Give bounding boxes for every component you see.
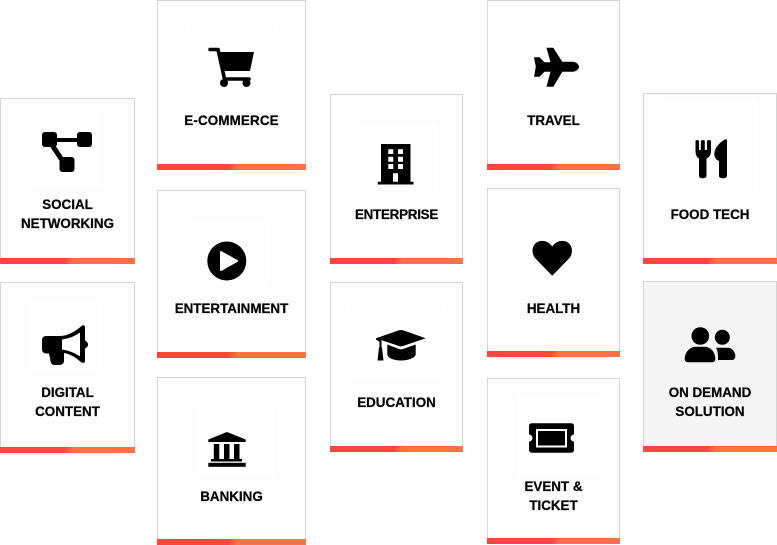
- panel: health: [487, 188, 620, 357]
- accent bar: [487, 164, 620, 170]
- label: digital content: [35, 385, 100, 419]
- accent bar: [330, 446, 463, 452]
- icon: people: [684, 327, 736, 362]
- icon: airplane: [534, 48, 579, 87]
- accent bar: [487, 351, 620, 357]
- panel: travel: [487, 0, 620, 170]
- label: event and ticket: EVENT &: [524, 479, 583, 494]
- icon: megaphone: [42, 325, 88, 365]
- label: event and ticket: [524, 479, 583, 513]
- panel: digital content: [0, 282, 135, 453]
- panel: education: [330, 282, 463, 452]
- label: entertainment: ENTERTAINMENT: [175, 301, 288, 316]
- label: education: EDUCATION: [357, 395, 436, 410]
- label: on demand solution: ON DEMAND: [669, 385, 751, 400]
- panel: e-commerce: [157, 0, 306, 170]
- panel: event and ticket: [487, 378, 620, 544]
- icon: bank building: [208, 432, 246, 467]
- label: food tech: FOOD TECH: [671, 207, 749, 222]
- label: travel: TRAVEL: [527, 113, 580, 128]
- label: digital content: CONTENT: [35, 404, 100, 419]
- icon: office building: [378, 144, 414, 184]
- label: social networking: SOCIAL: [42, 197, 93, 212]
- panel: on demand solution: [643, 281, 777, 452]
- label: event and ticket: TICKET: [529, 498, 578, 513]
- accent bar: [487, 538, 620, 544]
- label: e-commerce: E-COMMERCE: [184, 113, 279, 128]
- icon: fork and knife: [696, 139, 727, 178]
- panel: banking: [157, 377, 306, 545]
- accent bar: [643, 446, 777, 452]
- icon: play button: [207, 242, 246, 280]
- accent bar: [0, 258, 135, 264]
- accent bar: [157, 352, 306, 358]
- label: social networking: NETWORKING: [21, 216, 114, 231]
- icon: connected nodes: [42, 132, 92, 172]
- icon: heart: [532, 240, 572, 276]
- panel: entertainment: [157, 190, 306, 358]
- accent bar: [643, 258, 777, 264]
- accent bar: [157, 539, 306, 545]
- label: banking: BANKING: [200, 489, 263, 504]
- icon: shopping cart: [208, 48, 254, 87]
- panel: food tech: [643, 93, 777, 264]
- icon: ticket: [529, 423, 574, 453]
- accent bar: [330, 258, 463, 264]
- label: on demand solution: [669, 385, 751, 419]
- accent bar: [157, 164, 306, 170]
- label: on demand solution: SOLUTION: [675, 404, 745, 419]
- label: enterprise: ENTERPRISE: [355, 207, 438, 222]
- label: social networking: [21, 197, 114, 231]
- accent bar: [0, 447, 135, 453]
- label: digital content: DIGITAL: [41, 385, 94, 400]
- panel: enterprise: [330, 94, 463, 264]
- label: health: HEALTH: [527, 301, 580, 316]
- panel: social networking: [0, 98, 135, 264]
- icon: graduation cap: [376, 330, 426, 360]
